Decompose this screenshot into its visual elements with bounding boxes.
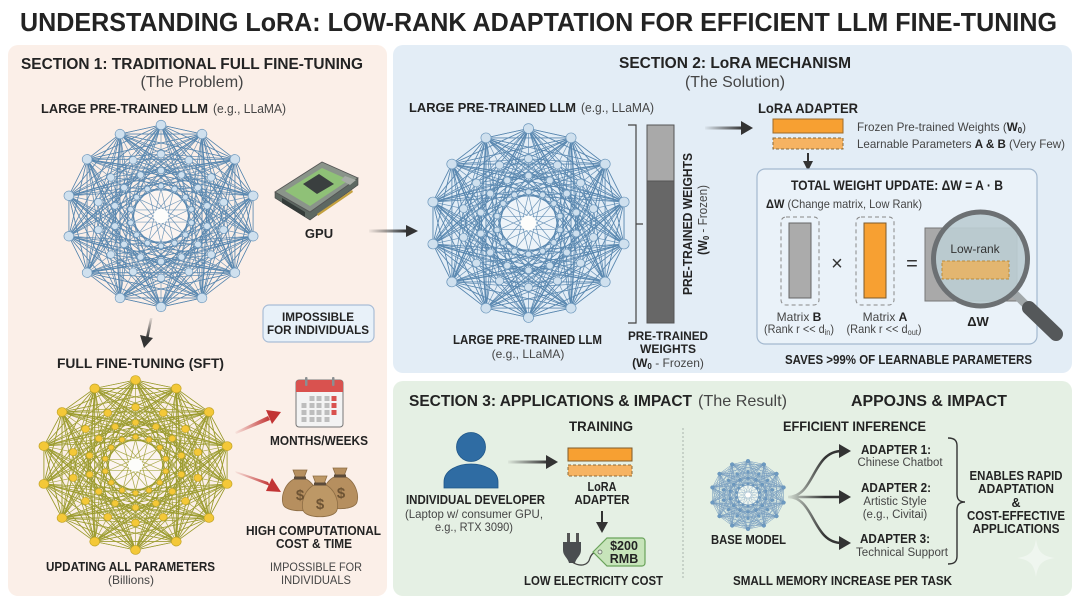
label: enables rapid adaptation: & (1011, 496, 1021, 510)
label: saves 99 percent: SAVES >99% OF LEARNABLE PARAMETERS (785, 352, 1032, 367)
arrow: to money bags (235, 471, 281, 492)
icon: sparkle (1017, 539, 1055, 577)
matrix B (781, 217, 819, 305)
label: updating all parameters: UPDATING ALL PARAMETERS (46, 559, 215, 574)
brace (948, 438, 965, 564)
label: small memory increase: SMALL MEMORY INCREASE PER TASK (733, 574, 952, 588)
label: adapter 1 (858, 443, 943, 469)
icon: money bags: $ (337, 485, 346, 502)
label: delta W: ΔW (967, 314, 990, 329)
icon: price tag: $200 (610, 539, 638, 553)
label: pre-trained weights bottom: - Frozen) (652, 356, 704, 370)
icon: LoRA adapter bars (568, 448, 632, 476)
label: adapter 1: Chinese Chatbot (858, 457, 943, 469)
label: large pre-trained LLM: (e.g., LLaMA) (213, 102, 286, 116)
heading: total weight update: TOTAL WEIGHT UPDATE: ΔW = A · B (791, 178, 1003, 193)
label: matrix B: (Rank r << d (764, 322, 831, 336)
label: impossible for individuals: IMPOSSIBLE FOR (270, 560, 362, 574)
label: large pre-trained LLM: (e.g., LLaMA) (581, 101, 654, 115)
legend: frozen weights: ) (1022, 120, 1026, 134)
panel: section 3 applications and impact (393, 381, 1072, 596)
subheading: the solution: (The Solution) (685, 74, 785, 91)
heading: garbled applications and impact: APPOJNS & IMPACT (851, 393, 1007, 410)
arrows: base model to adapters (788, 444, 851, 550)
label: matrix A (846, 310, 922, 337)
label: adapter 3: Technical Support (856, 547, 949, 559)
icon: money bags (282, 468, 358, 517)
label: LoRA adapter: LoRA (588, 480, 616, 494)
arrow: adapter to update box (803, 153, 813, 171)
legend: frozen weights: Frozen Pre-trained Weights (W (857, 120, 1018, 134)
label: matrix A: Matrix A (863, 310, 908, 324)
label: large pre-trained LLM bottom: LARGE PRE-TRAINED LLM (453, 333, 602, 347)
label: large pre-trained LLM: LARGE PRE-TRAINED LLM (409, 100, 576, 115)
label: high computational cost and time: COST & TIME (276, 536, 352, 551)
heading: efficient inference: EFFICIENT INFERENCE (783, 418, 926, 434)
label: enables rapid adaptation: COST-EFFECTIVE (967, 509, 1065, 523)
heading: training: TRAINING (569, 418, 633, 434)
icon: GPU card (275, 162, 358, 220)
label: enables rapid adaptation: ADAPTATION (978, 482, 1054, 496)
icon: price tag: RMB (610, 552, 638, 566)
bracket: weights bracket (628, 125, 643, 323)
callout: impossible for individuals (263, 305, 374, 342)
matrix A (856, 217, 894, 305)
panel: section 1 traditional full fine-tuning (5, 45, 387, 596)
label: pre-trained weights bottom: WEIGHTS (640, 342, 696, 356)
label: GPU: GPU (305, 226, 333, 241)
label: individual developer: INDIVIDUAL DEVELOPER (406, 493, 545, 507)
arrow: GPU to section 2 (369, 225, 418, 237)
label: rotated pre-trained weights: - Frozen) (696, 185, 710, 236)
icon: calendar (296, 377, 343, 427)
icon: plug (563, 533, 600, 565)
panel: total weight update (757, 169, 1056, 344)
icon: developer person (444, 432, 498, 488)
label: pre-trained weights bottom: (W (632, 356, 652, 371)
legend: learnable parameters: Learnable Parameters A & B (Very Few) (857, 137, 1065, 151)
label: LoRA adapter (574, 480, 630, 507)
label: billions: (Billions) (108, 573, 154, 587)
label: LoRA adapter: ADAPTER (574, 493, 630, 507)
label: matrix B: ) (830, 322, 834, 336)
chart: yellow neural network (5, 347, 266, 583)
heading: section 3: (The Result) (698, 393, 787, 410)
icon: price tag (593, 538, 645, 566)
label: pre-trained weights bottom (628, 329, 708, 371)
label: large pre-trained LLM bottom: (e.g., LLaMA) (492, 347, 564, 361)
heading: LoRA adapter: LoRA ADAPTER (758, 100, 858, 116)
label: adapter 2: (e.g., Civitai) (863, 509, 927, 521)
chart: base model network (697, 448, 799, 542)
label: pre-trained weights bottom: PRE-TRAINED (628, 329, 708, 343)
title: UNDERSTANDING LoRA: LOW-RANK ADAPTATION FOR EFFICIENT LLM FINE-TUNING (20, 7, 1057, 37)
heading: section 3: SECTION 3: APPLICATIONS & IMPACT (409, 393, 692, 410)
subheading: the problem: (The Problem) (140, 74, 244, 91)
label: enables rapid adaptation: ENABLES RAPID (970, 469, 1062, 483)
label: enables rapid adaptation: APPLICATIONS (972, 522, 1060, 536)
label: large pre-trained LLM (409, 100, 654, 115)
label: matrix B (764, 310, 834, 337)
label: adapter 2: Artistic Style (863, 496, 927, 508)
label: large pre-trained LLM bottom (453, 333, 602, 361)
label: individual developer: e.g., RTX 3090) (435, 520, 513, 534)
chart: blue neural network (392, 92, 665, 354)
label: adapter 3: ADAPTER 3: (860, 532, 930, 546)
label: adapter 2: ADAPTER 2: (861, 481, 931, 495)
icon: money bags: $ (316, 496, 325, 513)
label: change matrix: ΔW (Change matrix, Low Rank) (766, 197, 922, 211)
label: adapter 2 (861, 481, 931, 521)
label: matrix B: Matrix B (777, 310, 822, 324)
label: impossible for individuals: INDIVIDUALS (281, 573, 351, 587)
legend: frozen weights: 0 (1018, 126, 1023, 135)
label: individual developer (405, 493, 545, 534)
label: enables rapid adaptation (967, 469, 1065, 536)
label: low electricity cost: LOW ELECTRICITY COST (524, 574, 663, 588)
panel: section 2 LoRA mechanism (392, 45, 1072, 373)
arrow: network to full fine-tuning (140, 318, 153, 348)
label: large pre-trained LLM: LARGE PRE-TRAINED LLM (41, 101, 208, 116)
legend: frozen weights (773, 119, 1026, 135)
icon: delta W matrix with magnifier: Low-rank (950, 242, 1001, 256)
label: large pre-trained LLM (41, 101, 286, 116)
arrow: to LoRA adapter (705, 121, 753, 135)
label: matrix A: ) (918, 322, 922, 336)
label: rotated pre-trained weights: PRE-TRAINED WEIGHTS (680, 153, 695, 295)
icon: delta W matrix with magnifier (925, 212, 1056, 334)
bar: pre-trained weights (647, 125, 674, 323)
label: base model: BASE MODEL (711, 533, 786, 547)
icon: money bags: $ (296, 487, 305, 504)
label: high computational cost and time: HIGH COMPUTATIONAL (246, 523, 381, 538)
heading: full fine-tuning: FULL FINE-TUNING (SFT) (57, 356, 224, 371)
label: matrix A: (Rank r << d (846, 322, 913, 336)
arrow: to calendar (235, 410, 281, 434)
label: matrix A: out (908, 328, 919, 337)
symbol: multiply: × (831, 253, 843, 275)
label: adapter 3 (856, 532, 949, 559)
chart: blue neural network (30, 90, 292, 342)
symbol: equals: = (906, 253, 918, 275)
arrow: developer to adapter (508, 455, 558, 469)
label: individual developer: (Laptop w/ consumer GPU, (405, 507, 543, 521)
heading: section 1: SECTION 1: TRADITIONAL FULL FINE-TUNING (21, 56, 363, 73)
label: adapter 1: ADAPTER 1: (861, 443, 931, 457)
label: rotated pre-trained weights (680, 153, 711, 295)
callout: impossible for individuals: FOR INDIVIDUALS (267, 323, 369, 337)
label: pre-trained weights bottom: 0 (647, 362, 652, 371)
heading: section 2: SECTION 2: LoRA MECHANISM (619, 55, 851, 72)
arrow: adapter to cost (596, 511, 608, 533)
label: impossible for individuals (270, 560, 362, 587)
label: rotated pre-trained weights: 0 (702, 235, 711, 240)
label: months/weeks: MONTHS/WEEKS (270, 434, 368, 448)
label: rotated pre-trained weights: (W (696, 235, 711, 255)
label: matrix B: in (825, 328, 830, 337)
callout: impossible for individuals: IMPOSSIBLE (282, 310, 354, 324)
label: high computational cost and time (246, 523, 381, 551)
